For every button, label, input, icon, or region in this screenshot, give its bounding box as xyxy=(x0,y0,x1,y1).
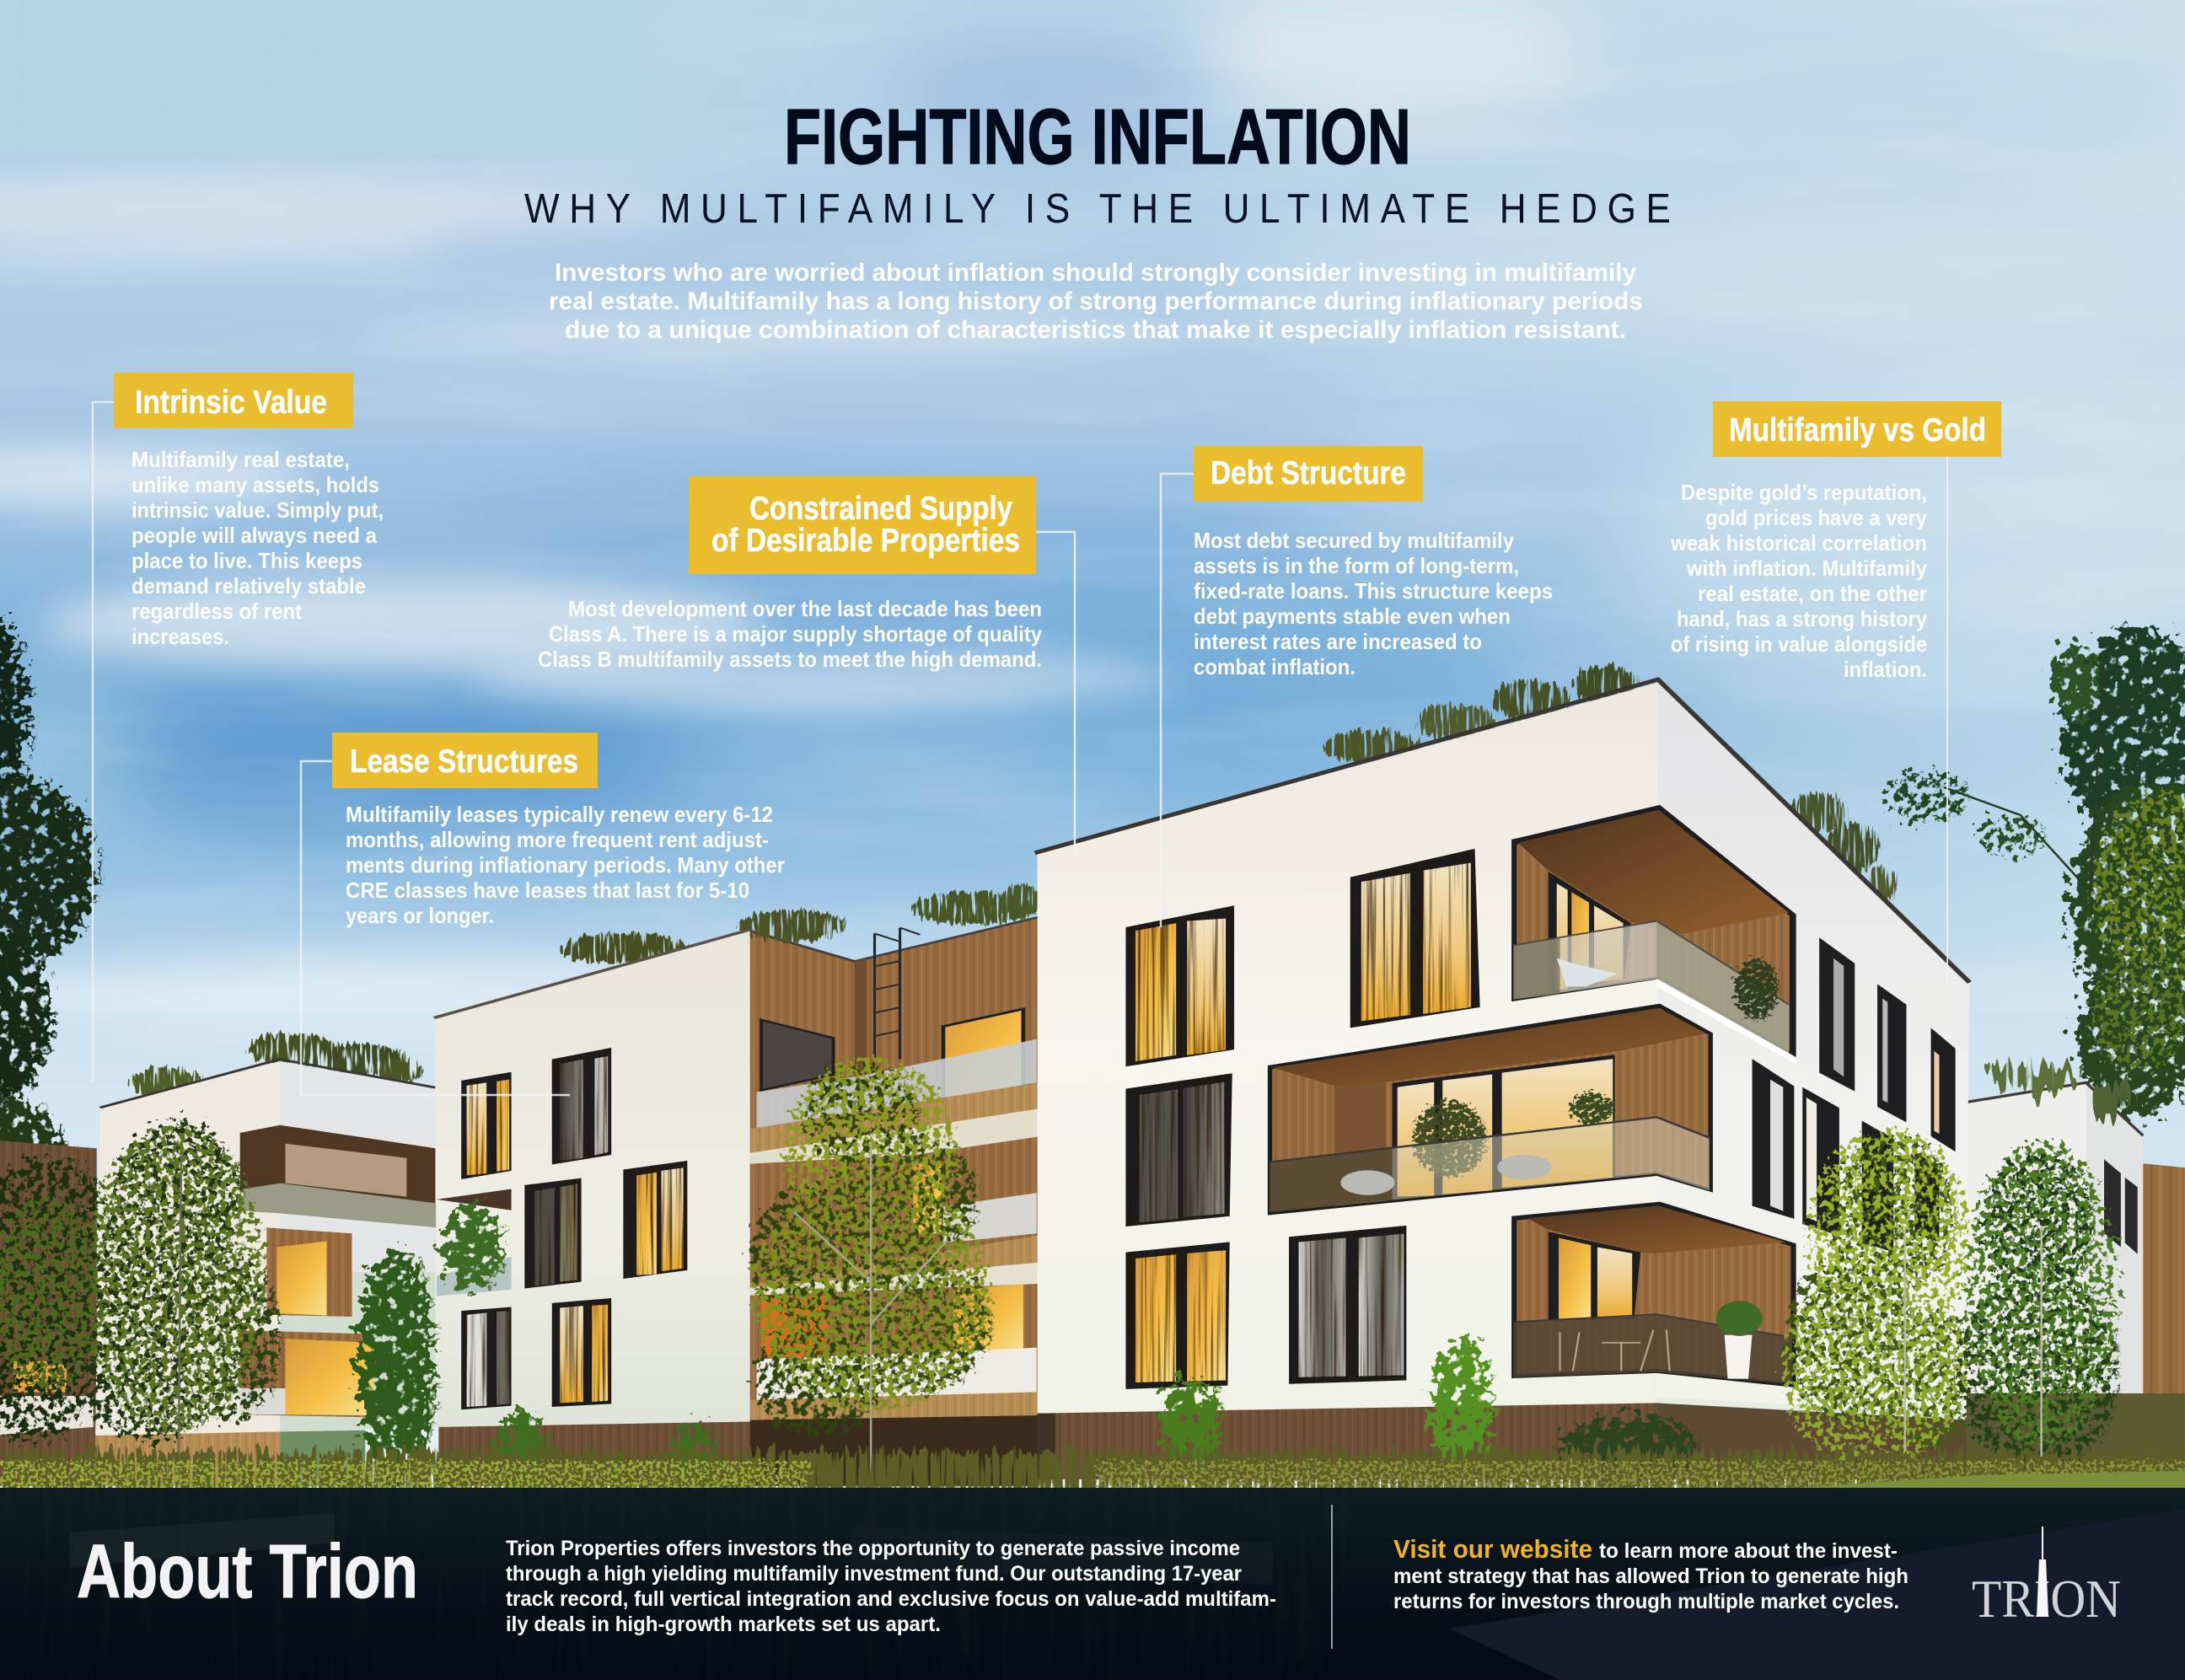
connector: Multifamily vs Gold xyxy=(1946,456,1948,985)
left building body xyxy=(95,1061,280,1436)
footer call to action xyxy=(1393,1534,1909,1613)
panel: Constrained Supply xyxy=(538,476,1042,672)
upper balcony xyxy=(1511,805,1796,1064)
panel: Debt Structure: debt payments stable even when xyxy=(1194,604,1511,629)
panel: Debt Structure: fixed-rate loans. This structure keeps xyxy=(1194,578,1553,604)
panel: Debt Structure: Most debt secured by multifamily xyxy=(1194,528,1514,553)
panel: Intrinsic Value: people will always need a xyxy=(132,523,377,548)
panel: Constrained Supply: Class A. There is a major supply shortage of quality xyxy=(549,621,1042,647)
ground grass strip xyxy=(0,1452,2185,1502)
intro text xyxy=(549,259,1643,344)
panel: Intrinsic Value: Multifamily real estate, xyxy=(132,447,350,472)
main building xyxy=(1002,666,1969,1479)
lower balcony xyxy=(1511,1202,1796,1387)
middle balcony xyxy=(1268,1004,1713,1216)
panel: Lease Structures: ments during inflationary periods. Many other xyxy=(346,852,785,878)
panel: Intrinsic Value: place to live. This keeps xyxy=(132,548,362,573)
far right building xyxy=(1957,1063,2185,1484)
panel: Lease Structures: Multifamily leases typically renew every 6-12 xyxy=(346,802,773,827)
far left wood wing xyxy=(0,1141,97,1486)
panel: Debt Structure xyxy=(1194,446,1553,679)
tree: right branches xyxy=(1944,655,2104,892)
panel: Intrinsic Value xyxy=(114,373,384,649)
middle building wood wing xyxy=(750,917,1040,1486)
panel: Multifamily vs Gold: with inflation. Multifamily xyxy=(1686,556,1927,581)
panel: Lease Structures: years or longer. xyxy=(346,903,494,928)
logo: Trion xyxy=(1972,1527,2121,1629)
footer call to action: to learn more about the invest- xyxy=(1599,1539,1898,1563)
window 5 xyxy=(1289,1226,1406,1384)
left buildings xyxy=(0,892,1040,1486)
footer about paragraph: track record, full vertical integration and exclusive focus on value-add multifam- xyxy=(506,1587,1276,1611)
connector: Debt Structure xyxy=(1161,474,1194,927)
window 2 xyxy=(1350,849,1480,1028)
main building faces xyxy=(1038,683,1658,1414)
panel: Multifamily vs Gold: Despite gold’s reputation, xyxy=(1681,480,1927,505)
footer panel xyxy=(0,1488,2185,1680)
panel: Constrained Supply: Class B multifamily assets to meet the high demand. xyxy=(538,647,1042,672)
window 1 xyxy=(1125,905,1234,1066)
road shape xyxy=(1449,1509,2185,1680)
tree: right foreground pair xyxy=(1782,1131,2123,1484)
panel: Multifamily vs Gold: Multifamily vs Gold xyxy=(1729,412,1986,448)
middle wing upper window xyxy=(761,1020,833,1090)
panel: Debt Structure: assets is in the form of long-term, xyxy=(1194,553,1519,578)
left building balcony 3 xyxy=(240,1330,372,1417)
connector: Lease Structures xyxy=(301,761,570,1095)
panel: Lease Structures xyxy=(332,733,785,928)
footer call to action: Visit our website xyxy=(1393,1534,1592,1564)
panel: Constrained Supply: Most development over the last decade has been xyxy=(568,596,1042,621)
window 4 xyxy=(1125,1242,1230,1389)
roof grass: left building xyxy=(130,1033,422,1098)
windows on right face xyxy=(1753,937,1956,1253)
connector: Constrained Supply xyxy=(1035,532,1075,852)
window 3 xyxy=(1125,1073,1232,1226)
footer about paragraph: ily deals in high-growth markets set us apart. xyxy=(506,1613,941,1636)
left building balcony 1 xyxy=(240,1125,435,1206)
intro text: real estate. Multifamily has a long history of strong performance during inflationary periods xyxy=(549,287,1643,315)
panel: Multifamily vs Gold: real estate, on the other xyxy=(1698,581,1927,606)
panel: Multifamily vs Gold xyxy=(1670,401,2001,682)
panel: Lease Structures: CRE classes have leases that last for 5-10 xyxy=(346,878,749,903)
foreground trees and shrubs xyxy=(0,1059,2123,1487)
connector: Intrinsic Value xyxy=(93,402,114,1082)
panel: Multifamily vs Gold: weak historical correlation xyxy=(1670,530,1927,556)
intro text: Investors who are worried about inflation should strongly consider investing in multifamily xyxy=(555,259,1636,287)
panel: Debt Structure: combat inflation. xyxy=(1194,654,1356,679)
panel: Intrinsic Value: intrinsic value. Simply put, xyxy=(132,497,384,523)
panel: Constrained Supply: of Desirable Properties xyxy=(711,523,1020,559)
middle building windows xyxy=(461,1048,687,1409)
intro text: due to a unique combination of characteristics that make it especially inflation resistant. xyxy=(565,316,1626,344)
tree: left vines xyxy=(358,1205,504,1484)
panel: Multifamily vs Gold: hand, has a strong history xyxy=(1677,606,1927,631)
shrubs in front of building xyxy=(497,1340,1697,1487)
main building base xyxy=(1038,1403,1656,1479)
far right roof grass xyxy=(1984,1063,2134,1118)
panel: Intrinsic Value: Intrinsic Value xyxy=(135,384,327,421)
main roof grass xyxy=(1002,666,1898,919)
background trees behind buildings xyxy=(0,621,2185,1215)
logo: Trion: TRION xyxy=(1972,1569,2121,1629)
subtitle: WHY MULTIFAMILY IS THE ULTIMATE HEDGE xyxy=(524,185,1671,232)
panel: Multifamily vs Gold: of rising in value alongside xyxy=(1671,631,1927,657)
title: FIGHTING INFLATION xyxy=(784,93,1411,180)
middle wing balconies xyxy=(757,1039,1037,1128)
middle building roof grass xyxy=(563,892,1033,964)
panel: Intrinsic Value: demand relatively stable xyxy=(132,573,366,598)
panel: Intrinsic Value: unlike many assets, holds xyxy=(132,472,379,497)
left building base xyxy=(95,1431,280,1486)
footer heading: About Trion xyxy=(77,1530,418,1614)
panel: Lease Structures: Lease Structures xyxy=(350,743,578,780)
tree: centre foreground xyxy=(751,1059,995,1484)
panel: Lease Structures: months, allowing more frequent rent adjust- xyxy=(346,827,769,852)
tree: right foliage xyxy=(1888,627,2185,1116)
middle building white face xyxy=(435,931,750,1427)
left building balcony 2 xyxy=(266,1227,352,1317)
footer call to action: returns for investors through multiple market cycles. xyxy=(1393,1590,1899,1613)
panel: Debt Structure: Debt Structure xyxy=(1211,455,1406,491)
panel: Intrinsic Value: increases. xyxy=(132,624,229,649)
panel: Intrinsic Value: regardless of rent xyxy=(132,598,302,624)
footer about paragraph xyxy=(506,1537,1276,1636)
panel: Debt Structure: interest rates are increased to xyxy=(1194,629,1482,654)
panel: Multifamily vs Gold: inflation. xyxy=(1844,657,1927,682)
windows on left face xyxy=(1125,849,1480,1389)
footer about paragraph: Trion Properties offers investors the opportunity to generate passive income xyxy=(506,1537,1240,1560)
ladder xyxy=(875,928,920,1060)
panel: Constrained Supply: Constrained Supply xyxy=(749,491,1012,527)
tree: left edge dark foliage xyxy=(0,621,98,1215)
tree: far left cluster xyxy=(0,1120,284,1484)
footer about paragraph: through a high yielding multifamily investment fund. Our outstanding 17-year xyxy=(506,1562,1242,1586)
footer call to action: ment strategy that has allowed Trion to generate high xyxy=(1393,1565,1909,1588)
panel: Multifamily vs Gold: gold prices have a very xyxy=(1705,505,1927,530)
